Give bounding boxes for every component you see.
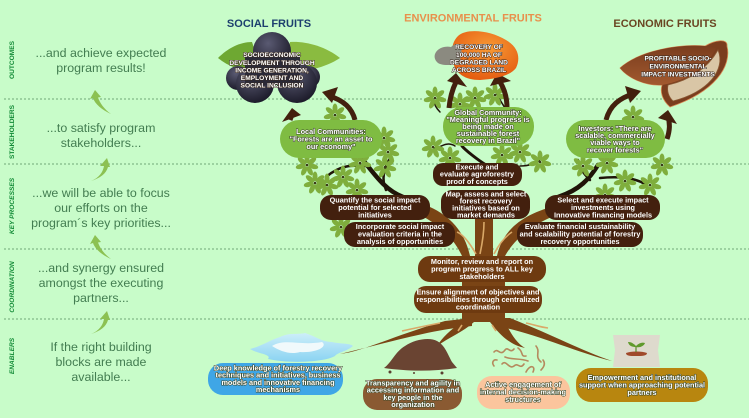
pill: knowledge: techniques and initiatives, business: [216, 370, 340, 380]
pill: ensure: responsibilities through centralized: [416, 295, 540, 304]
pill: incorporate: Incorporate social impact: [356, 222, 445, 231]
side labels: COORDINATION: [9, 261, 16, 313]
pill: global community: Global Community:: [454, 108, 522, 117]
left narrative text: If the right building: [50, 340, 152, 354]
pill: evaluate: Evaluate financial sustainability: [525, 222, 636, 231]
left narrative text: ...we will be able to focus: [32, 186, 170, 200]
pill: quantify: [320, 195, 430, 220]
fruit: acai berries: DEVELOPMENT THROUGH: [229, 60, 315, 67]
pill: monitor: [418, 256, 546, 282]
title: economic fruits: ECONOMIC FRUITS: [613, 18, 717, 30]
pill: engagement: Active engagement of: [485, 380, 561, 389]
side labels: KEY PROCESSES: [9, 177, 16, 234]
fruit: cocoa pod: ENVIRONMENTAL: [649, 64, 707, 70]
pill: global community: sustainable forest: [457, 129, 520, 138]
pill: evaluate: recovery opportunities: [540, 237, 620, 246]
side labels: [9, 40, 16, 374]
pill: transparency: organization: [391, 400, 435, 409]
pill: quantify: potential for selected: [338, 203, 412, 212]
pill: global community: "Meaningful progress is: [446, 115, 530, 124]
pill: engagement: structures: [505, 395, 541, 404]
tree trunk: [420, 190, 560, 322]
pill: select: Innovative financing models: [554, 210, 652, 220]
pill: map: market demands: [457, 210, 515, 220]
pill: local communities: our economy": [306, 142, 356, 151]
pill: map: initiatives based on: [452, 204, 520, 212]
pill: monitor: Monitor, review and report on: [431, 257, 533, 266]
left narrative text: ...to satisfy program: [47, 121, 155, 135]
pill: transparency: [363, 378, 462, 410]
pill: investors: viable ways to: [590, 138, 640, 147]
pill: transparency: key people in the: [383, 393, 443, 402]
pill: knowledge: models and innovative financing: [221, 378, 335, 387]
fruit: cashew: DEGRADED LAND: [450, 60, 508, 66]
pill: monitor: program progress to ALL key: [431, 264, 534, 274]
pill: investors: scalable, commercially: [575, 131, 656, 140]
left narrative text: stakeholders...: [61, 136, 141, 150]
pill: empowerment: Empowerment and institutional: [588, 373, 696, 382]
pill: knowledge: Deep knowledge of forestry recovery: [214, 364, 343, 372]
pill: execute: proof of concepts: [446, 177, 508, 186]
pill: select: Select and execute impact: [557, 196, 649, 204]
left narrative text: partners...: [73, 291, 129, 305]
left narrative text: [31, 46, 171, 384]
icon: worms: [493, 346, 544, 372]
pill: local communities: "Forests are an asset to: [290, 134, 373, 144]
pill: knowledge: mechanisms: [256, 385, 300, 394]
pill: map: forest recovery: [460, 196, 513, 206]
pill: knowledge: [208, 363, 343, 395]
fruit: acai berries: [218, 32, 340, 103]
branches: [326, 92, 645, 197]
pill: investors: recover forests": [587, 146, 643, 154]
pill: investors: Investors: "There are: [578, 124, 652, 133]
icon: water: [250, 333, 353, 362]
fruit: cashew: [435, 31, 518, 80]
pill: execute: evaluate agroforestry: [440, 170, 515, 178]
left narrative text: our efforts on the: [54, 201, 148, 215]
side labels: ENABLERS: [9, 337, 16, 374]
pill: incorporate: [344, 222, 455, 247]
side labels: OUTCOMES: [9, 40, 16, 79]
pill: incorporate: analysis of opportunities: [357, 237, 443, 246]
fruit: cocoa pod: IMPACT INVESTMENTS: [641, 72, 715, 78]
icon: soil mound: [384, 339, 457, 374]
pill: global community: recovery in Brazil": [456, 136, 520, 145]
left narrative text: ...and synergy ensured: [38, 261, 164, 275]
pill: map: [441, 190, 530, 220]
pill: empowerment: [576, 368, 708, 402]
title: environmental fruits: ENVIRONMENTAL FRUITS: [404, 12, 542, 24]
fruit: acai berries: SOCIOECONOMIC: [243, 52, 301, 59]
side labels: STAKEHOLDERS: [9, 104, 16, 159]
fruit: cashew: 100,000 HA OF: [456, 52, 502, 59]
pill: evaluate: [517, 222, 643, 247]
pill: global community: [443, 107, 534, 146]
foliage: [295, 84, 674, 238]
fruit: cashew: ACROSS BRAZIL: [452, 67, 506, 74]
pill: select: investments using: [571, 203, 635, 212]
fruit: acai berries: SOCIAL INCLUSION: [241, 82, 304, 90]
pill: empowerment: partners: [627, 388, 657, 397]
pill: execute: Execute and: [456, 162, 498, 172]
pill: map: Map, assess and select: [446, 190, 527, 198]
pill: ensure: [414, 286, 542, 313]
trunk highlight arrows: [402, 222, 548, 331]
pill: transparency: accessing information and: [367, 386, 459, 394]
green arrows between bands: [90, 90, 111, 334]
pill: engagement: [477, 376, 570, 409]
tree roots: [340, 318, 612, 361]
pill: ensure: coordination: [456, 302, 500, 312]
left narrative text: program results!: [56, 61, 146, 75]
left narrative text: blocks are made: [56, 355, 147, 369]
left narrative text: available...: [71, 370, 131, 384]
arrows to fruits: [282, 73, 677, 139]
pill: investors: [566, 120, 665, 158]
icon: seedling sack: [613, 335, 660, 367]
title: social fruits: SOCIAL FRUITS: [227, 18, 311, 30]
pill: execute: [433, 162, 522, 186]
fruit: acai berries: INCOME GENERATION,: [235, 68, 309, 74]
pill: monitor: stakeholders: [459, 272, 505, 281]
left narrative text: program´s key priorities...: [31, 216, 171, 230]
pill: quantify: Quantify the social impact: [330, 196, 421, 204]
pill: empowerment: support when approaching potential: [579, 380, 705, 390]
pill: ensure: Ensure alignment of objectives and: [417, 288, 539, 296]
pill: transparency: Transparency and agility in: [366, 378, 460, 388]
fruit: cocoa pod: PROFITABLE SOCIO-: [645, 56, 711, 62]
fruit: cocoa pod: [620, 41, 728, 107]
fruit: cashew: RECOVERY OF: [455, 44, 503, 51]
pill: evaluate: and scalability potential of forestry: [520, 230, 641, 238]
left narrative text: ...and achieve expected: [36, 46, 167, 60]
pill: local communities: [280, 120, 382, 158]
pill: global community: being made on: [462, 122, 514, 131]
pill: incorporate: evaluation criteria in the: [358, 230, 442, 238]
pill: select: [545, 195, 660, 220]
fruit: acai berries: EMPLOYMENT AND: [241, 75, 303, 82]
band dividers: [4, 99, 749, 319]
pill: local communities: Local Communities:: [296, 127, 366, 136]
pill: engagement: internal decision-making: [480, 388, 566, 396]
pill: quantify: initiatives: [358, 210, 392, 220]
left narrative text: amongst the executing: [39, 276, 163, 290]
